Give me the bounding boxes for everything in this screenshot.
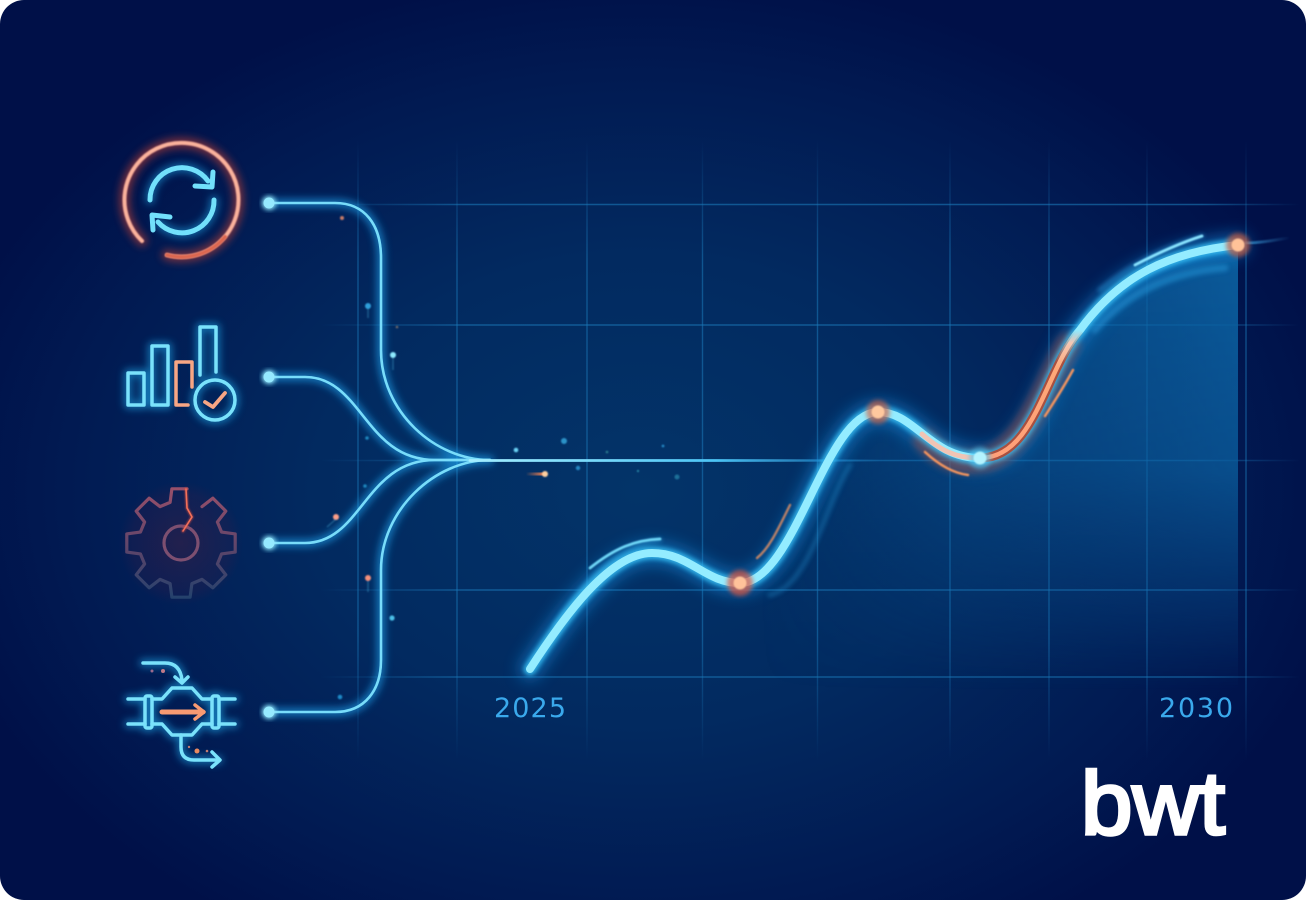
connector node: top	[264, 198, 274, 208]
converging lines from four sources	[269, 203, 880, 712]
icon: valve with flow arrows	[128, 663, 235, 767]
icon: cracked gear	[125, 486, 237, 599]
chart grid	[320, 140, 1300, 760]
milestone marker: second dip	[969, 447, 991, 469]
particles	[327, 216, 680, 699]
filled area under growth curve	[837, 250, 1238, 660]
milestone marker: first dip	[727, 570, 753, 596]
axis label 2025: 2025	[494, 693, 566, 724]
orange streaks	[757, 370, 1073, 558]
icon: bar chart with check	[128, 327, 235, 420]
logo: bwt: bwt	[1081, 753, 1225, 853]
orange segment of curve	[980, 330, 1080, 458]
bright streaks	[590, 539, 660, 568]
ghost streaks beside curve	[555, 236, 1225, 625]
curve outer glow	[530, 245, 1238, 669]
curve core	[530, 245, 1238, 669]
milestone marker: peak	[866, 400, 890, 424]
axis label 2030: 2030	[1159, 693, 1233, 724]
icon: refresh in red ring	[124, 143, 238, 257]
curve halo	[530, 245, 1238, 669]
connector node: third	[264, 538, 274, 548]
milestone marker: 2030 endpoint	[1226, 233, 1250, 257]
connector node: second	[264, 372, 274, 382]
red glow around orange segment	[925, 345, 1068, 462]
growth curve	[530, 236, 1288, 669]
connector node: bottom	[264, 706, 274, 718]
